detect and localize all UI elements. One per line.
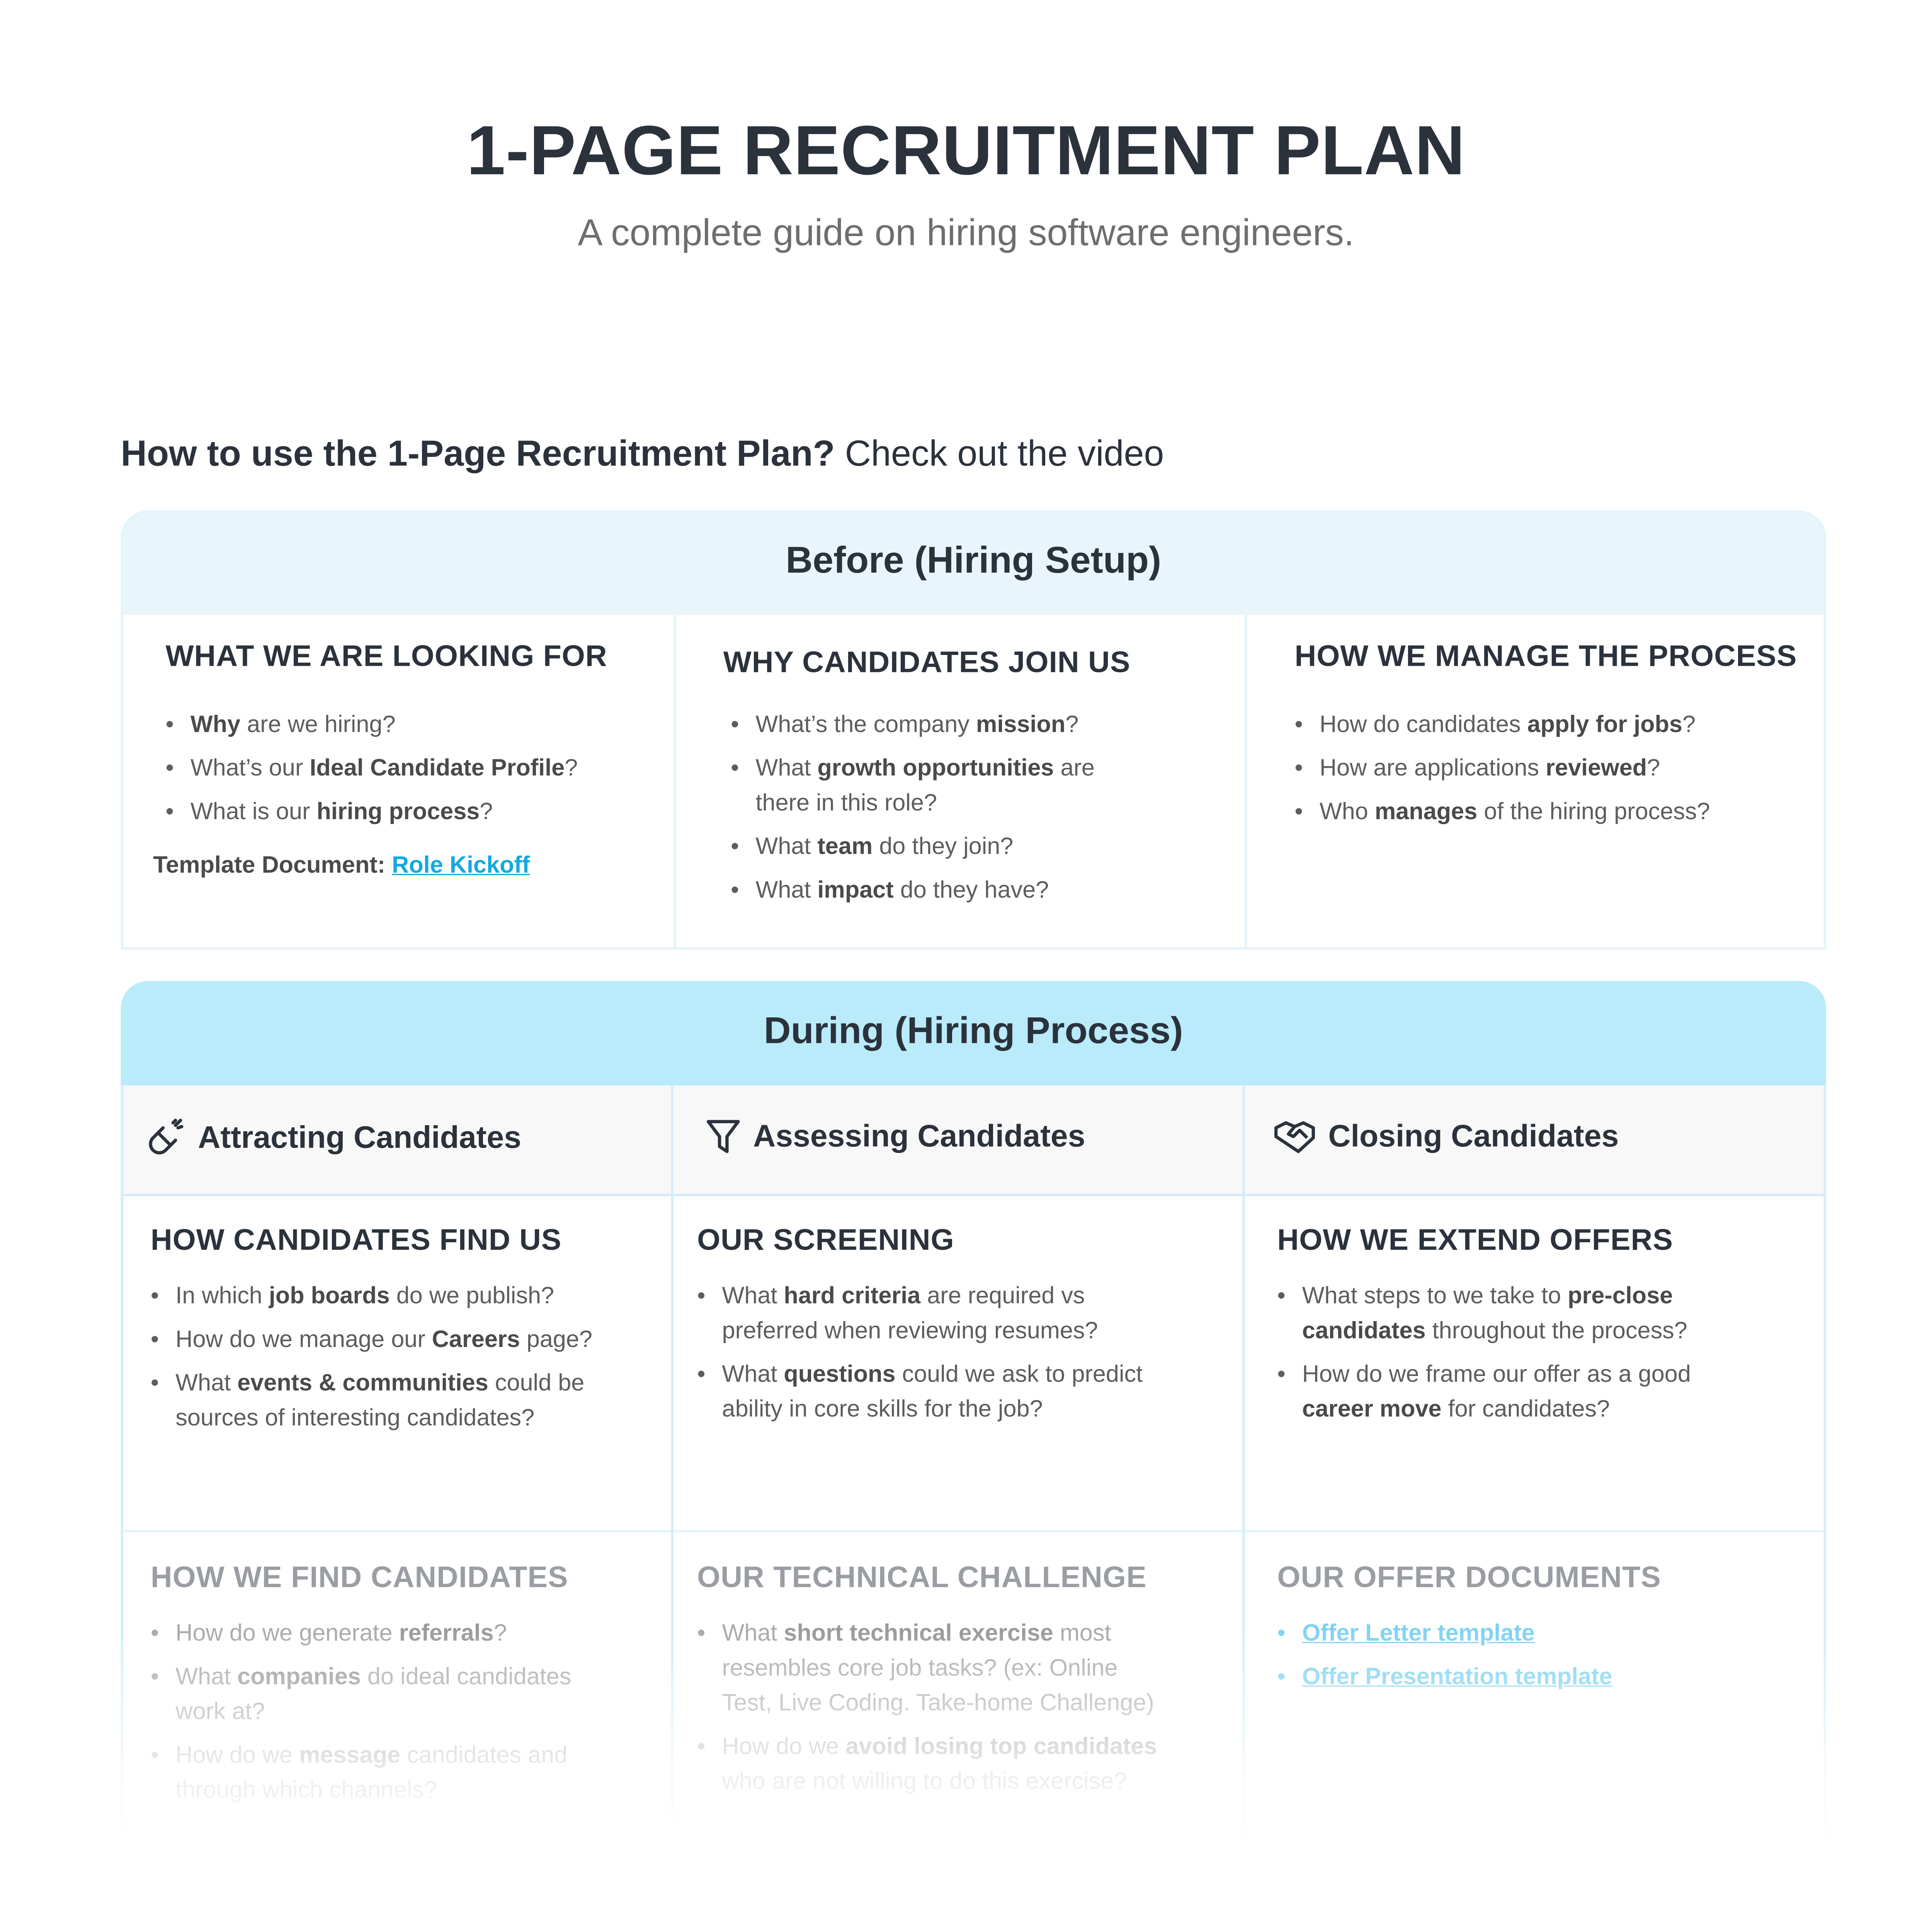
column: our screening	[697, 1224, 1220, 1437]
column: how we manage the process: How do candidates apply for jobs?	[1320, 712, 1696, 738]
column: how we find candidates: What companies do ideal candidates	[175, 1664, 571, 1690]
column: how we extend offers	[1277, 1224, 1800, 1437]
column: our technical challenge: OUR TECHNICAL CHALLENGE	[697, 1561, 1147, 1595]
panel: before	[121, 510, 1826, 950]
subtitle: A complete guide on hiring software engineers.	[578, 213, 1354, 254]
column: our screening: preferred when reviewing resumes?	[722, 1318, 1098, 1344]
column: our technical challenge: What short technical exercise most	[722, 1621, 1111, 1647]
tab: attracting: Attracting Candidates	[198, 1120, 521, 1155]
column: why candidates join us: WHY CANDIDATES JOIN US	[723, 646, 1131, 680]
column: how we find candidates	[151, 1561, 661, 1818]
how to use heading: How to use the 1-Page Recruitment Plan? Check out the video	[121, 434, 1164, 474]
template link: Template Document: Role Kickoff	[153, 853, 530, 879]
column: our technical challenge	[697, 1561, 1220, 1809]
column: why candidates join us: What growth opportunities are	[756, 756, 1095, 782]
before header: Before (Hiring Setup)	[786, 540, 1161, 582]
column: our offer documents: Offer Presentation template	[1302, 1664, 1612, 1690]
column: how we find candidates: How do we message candidates and	[175, 1743, 567, 1769]
column: how we find candidates: through which channels?	[175, 1778, 437, 1804]
column: our offer documents	[1277, 1561, 1800, 1704]
column: how we extend offers: HOW WE EXTEND OFFERS	[1277, 1224, 1673, 1257]
column: why candidates join us: there in this role?	[756, 791, 937, 816]
column: how we find candidates: How do we generate referrals?	[175, 1621, 507, 1647]
column: our screening: ability in core skills for the job?	[722, 1397, 1043, 1423]
column: our technical challenge: How do we avoid losing top candidates	[722, 1734, 1157, 1760]
column: why candidates join us: What team do they join?	[756, 834, 1013, 860]
icon: handshake	[1274, 1118, 1316, 1155]
icon: funnel	[706, 1118, 741, 1155]
column: why candidates join us: What’s the company mission?	[756, 712, 1078, 738]
column: our technical challenge: resembles core job tasks? (ex: Online	[722, 1656, 1118, 1682]
column: how we find candidates: HOW WE FIND CANDIDATES	[151, 1561, 568, 1595]
column: our technical challenge: who are not willing to do this exercise?	[722, 1769, 1127, 1795]
column: what we are looking for: Why are we hiring?	[190, 712, 396, 738]
column: how we manage the process: How are applications reviewed?	[1320, 756, 1660, 782]
column: our screening: What questions could we ask to predict	[722, 1362, 1143, 1388]
column: how we extend offers: What steps to we take to pre-close	[1302, 1284, 1673, 1310]
icon: magnet	[146, 1118, 185, 1158]
column: our offer documents: Offer Letter template	[1302, 1621, 1535, 1647]
column: what we are looking for: What’s our Ideal Candidate Profile?	[190, 756, 578, 782]
column: our technical challenge: Test, Live Coding. Take-home Challenge)	[722, 1690, 1154, 1717]
column: our screening: What hard criteria are required vs	[722, 1284, 1085, 1310]
column: how we extend offers: How do we frame our offer as a good	[1302, 1362, 1691, 1388]
tab: closing: Closing Candidates	[1328, 1119, 1619, 1153]
column: what we are looking for	[153, 640, 663, 880]
before header	[123, 513, 1824, 615]
column: why candidates join us	[723, 646, 1234, 917]
column: our offer documents: OUR OFFER DOCUMENTS	[1277, 1561, 1661, 1595]
column: our screening: OUR SCREENING	[697, 1224, 954, 1257]
fade overlay	[118, 1628, 1829, 1871]
column: how candidates find us: What events & communities could be	[175, 1371, 584, 1397]
column: how candidates find us	[151, 1224, 661, 1445]
column: how candidates find us: sources of interesting candidates?	[175, 1405, 534, 1432]
column: how candidates find us: How do we manage our Careers page?	[175, 1327, 592, 1353]
column: what we are looking for: WHAT WE ARE LOOKING FOR	[165, 640, 607, 673]
tab: assessing: Assessing Candidates	[753, 1119, 1085, 1153]
column: how we manage the process: Who manages of the hiring process?	[1320, 799, 1710, 825]
column: what we are looking for: What is our hiring process?	[190, 799, 493, 825]
column: how candidates find us: In which job boards do we publish?	[175, 1284, 554, 1310]
column: how we extend offers: career move for candidates?	[1302, 1397, 1610, 1423]
title: 1-PAGE RECRUITMENT PLAN	[467, 111, 1465, 189]
column: how we find candidates: work at?	[175, 1699, 265, 1725]
during header: During (Hiring Process)	[764, 1011, 1183, 1052]
column: how we extend offers: candidates throughout the process?	[1302, 1318, 1687, 1344]
column: how candidates find us: HOW CANDIDATES FIND US	[151, 1224, 561, 1257]
column: how we manage the process	[1295, 640, 1818, 839]
during header	[121, 981, 1826, 1085]
panel: during	[121, 981, 1826, 1869]
column: why candidates join us: What impact do they have?	[756, 878, 1049, 904]
column: how we manage the process: HOW WE MANAGE THE PROCESS	[1295, 640, 1797, 673]
